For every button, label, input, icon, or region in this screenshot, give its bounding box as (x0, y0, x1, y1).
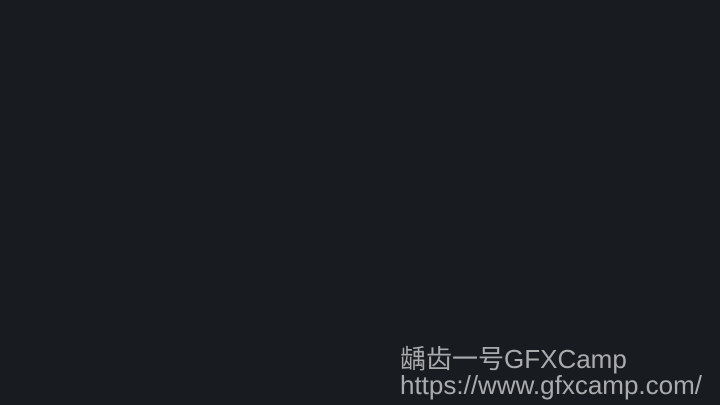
watermark line 2: https://www.gfxcamp.com/ (400, 370, 702, 400)
watermark text (400, 344, 702, 400)
watermark line 1: 龋齿一号GFXCamp (400, 344, 627, 374)
